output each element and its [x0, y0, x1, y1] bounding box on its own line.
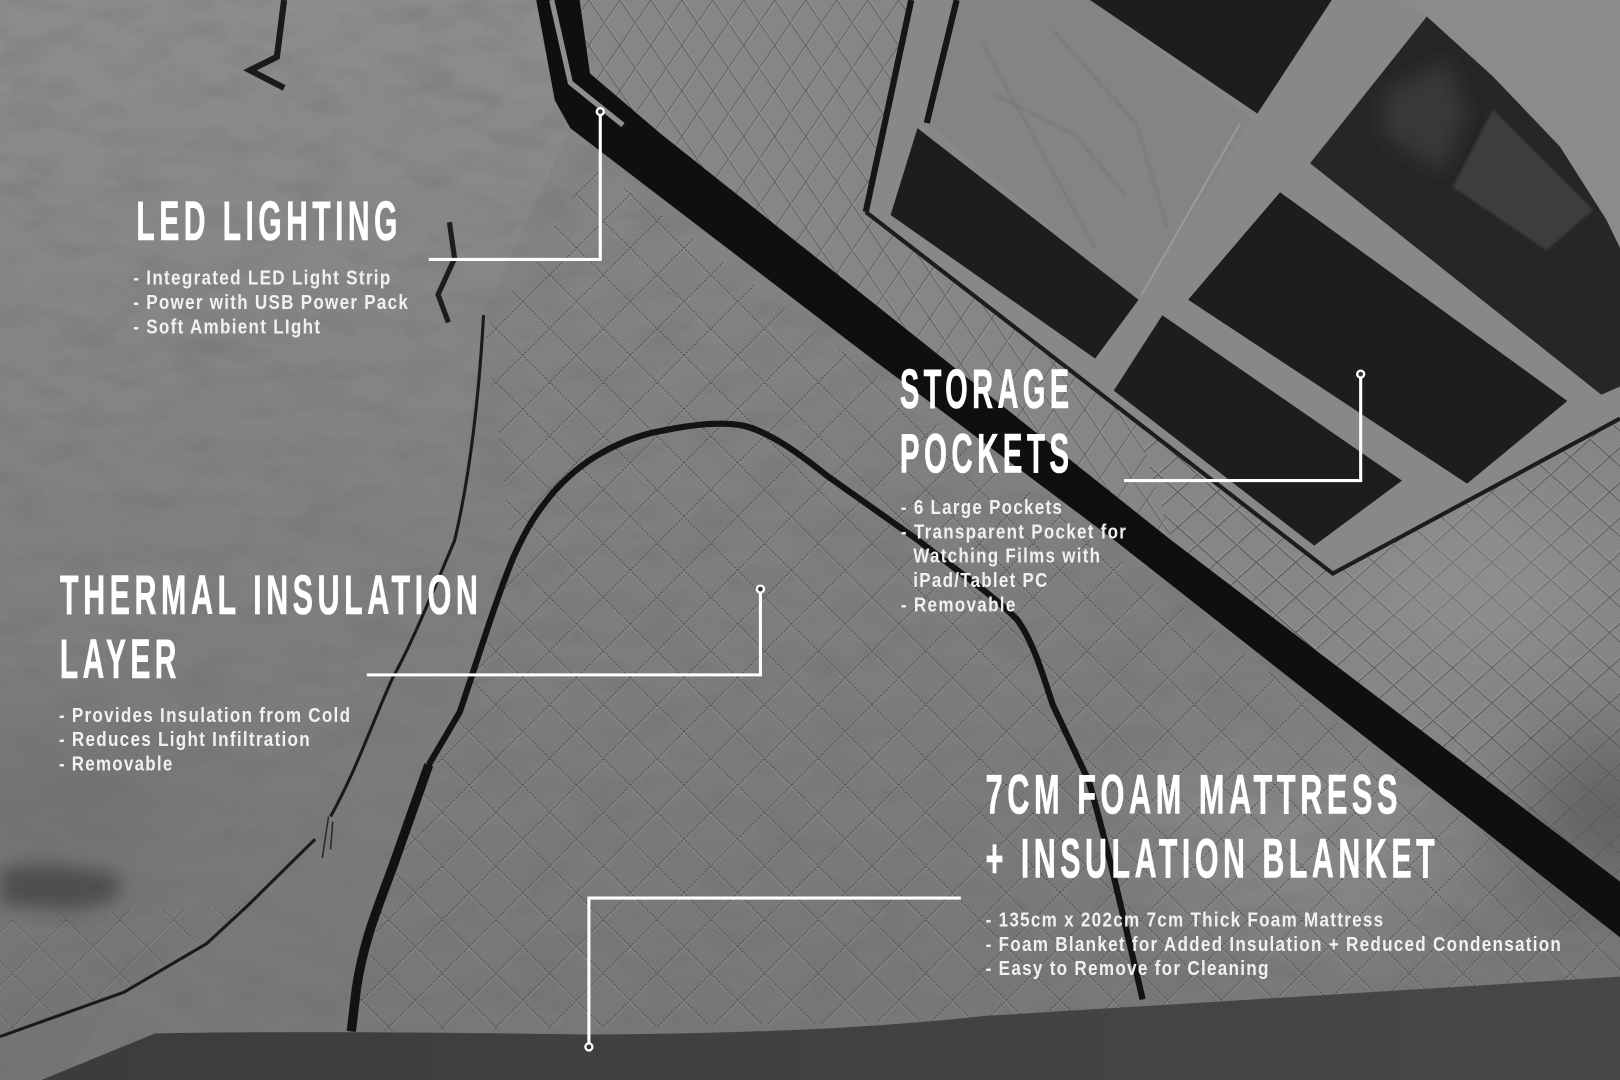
text block: storage pockets: iPad/Tablet PC — [913, 569, 1049, 592]
callout: foam mattress and blanket — [585, 762, 1562, 1050]
text block: storage pockets: Watching Films with — [913, 545, 1101, 568]
frame bottom edge — [866, 212, 1620, 574]
pocket 4 inner fold — [1384, 62, 1467, 171]
zip puller — [322, 816, 333, 858]
lower-left wall quilting — [0, 905, 248, 1037]
frame stripes — [866, 0, 957, 212]
pocket 2 — [1114, 315, 1402, 546]
black roof beam — [536, 0, 1620, 937]
text block: storage pockets: - Transparent Pocket for — [901, 520, 1127, 543]
top-right corner light area — [1400, 0, 1620, 253]
lower right wall quilting — [1136, 419, 1620, 882]
text block: foam mattress: - 135cm x 202cm 7cm Thick Foam Mattress — [986, 909, 1384, 932]
heading: thermal insulation layer: LAYER — [60, 627, 181, 690]
heading: foam mattress and blanket — [986, 762, 1439, 889]
lower-left shade — [0, 744, 176, 847]
text block: foam mattress: - Easy to Remove for Cleaning — [986, 957, 1270, 980]
door zip lower thick section — [351, 765, 429, 1031]
wall strap — [438, 222, 455, 322]
leader dot: thermal insulation — [757, 586, 764, 593]
callout: thermal insulation layer — [59, 563, 764, 775]
text block: thermal insulation: - Reduces Light Infiltration — [59, 728, 311, 751]
callout: LED lighting — [133, 108, 604, 338]
door zip upper arc — [429, 424, 1143, 999]
heading: LED lighting: LED LIGHTING — [136, 189, 402, 252]
pocket 4 — [1310, 17, 1620, 395]
pocket 4 inner panel — [1453, 110, 1593, 250]
pocket 5 — [1090, 0, 1332, 114]
leader dot: LED lighting — [597, 108, 604, 115]
window panel — [866, 0, 1620, 574]
callout: storage pockets — [900, 357, 1364, 616]
side seam zip — [0, 315, 484, 1037]
heading: thermal insulation layer — [60, 563, 482, 690]
text block: LED lighting: - Integrated LED Light Strip — [133, 267, 392, 290]
leader line: thermal insulation — [367, 589, 760, 675]
text block: thermal insulation: - Removable — [59, 752, 174, 775]
text block: storage pockets: - 6 Large Pockets — [901, 496, 1063, 519]
floor quilting — [351, 165, 1620, 1031]
upper fabric panel — [927, 0, 1252, 300]
heading: thermal insulation layer: THERMAL INSULATION — [60, 563, 482, 626]
pocket 1 — [891, 128, 1139, 359]
leader dot: foam mattress — [585, 1043, 592, 1050]
LED strip — [552, 0, 623, 125]
top strap — [250, 0, 284, 88]
text block: storage pockets — [901, 496, 1127, 616]
leader dot: storage pockets — [1357, 371, 1364, 378]
panel wrinkles — [982, 31, 1167, 248]
leader line: storage pockets — [1124, 374, 1361, 481]
lower right wall highlight — [1353, 506, 1601, 651]
heading: storage pockets — [900, 357, 1073, 484]
leader line: LED lighting — [429, 112, 600, 259]
leader line: foam mattress — [589, 898, 961, 1047]
pocket 3 — [1188, 192, 1567, 484]
text block: storage pockets: - Removable — [901, 593, 1017, 616]
pockets — [891, 0, 1620, 546]
bottom-left shadow — [0, 864, 122, 909]
upper right wall — [573, 0, 1620, 889]
heading: storage pockets: STORAGE — [900, 357, 1073, 420]
lower right wall shade — [1519, 734, 1620, 899]
seam — [1142, 124, 1240, 295]
text block: LED lighting: - Soft Ambient LIght — [133, 315, 321, 338]
floor highlight — [1136, 744, 1488, 930]
text block: LED lighting — [133, 267, 409, 338]
heading: storage pockets: POCKETS — [900, 421, 1073, 484]
text block: thermal insulation: - Provides Insulation from Cold — [59, 704, 351, 727]
upper wall quilting, left section — [580, 0, 1172, 541]
text block: thermal insulation — [59, 704, 351, 775]
text block: LED lighting: - Power with USB Power Pack — [133, 291, 409, 314]
mattress — [41, 977, 1620, 1080]
text block: foam mattress — [986, 909, 1562, 980]
